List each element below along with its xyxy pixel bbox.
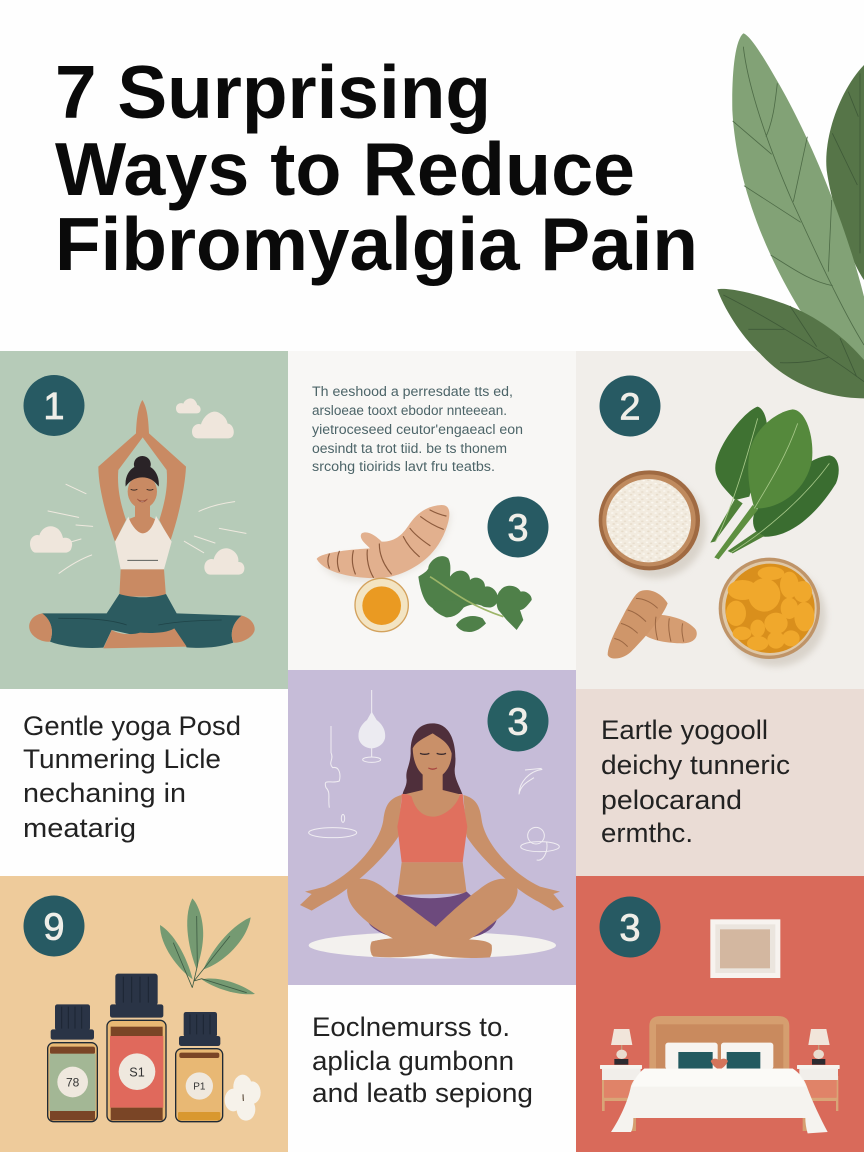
middle bottle: S1	[129, 1065, 145, 1079]
badge: number 1	[24, 375, 84, 436]
panel: gentle yoga caption: Tunmering Licle	[23, 744, 221, 774]
panel: meditation caption: aplicla gumbonn	[312, 1046, 514, 1076]
panel: gentle yoga tips caption: ermthc.	[601, 818, 693, 848]
badge: number 2	[600, 376, 660, 436]
turmeric roots	[608, 590, 697, 659]
text block: small note: yietroceseed ceutor'engaeacl eon	[312, 422, 523, 437]
rice bowl	[599, 470, 706, 578]
panel: meditation caption	[288, 985, 576, 1152]
badge: number 3: 3	[507, 702, 529, 744]
text block: small note: arsloeae tooxt ebodor nnteeean.	[312, 403, 507, 418]
pillows	[665, 1043, 773, 1070]
middle bottle	[107, 974, 166, 1122]
left nightstand and lamp	[600, 1029, 642, 1111]
badge: number 3	[600, 896, 660, 958]
illustration: oil bottles with sprig and flower	[48, 898, 261, 1122]
illustration: bowls, leaves and turmeric	[599, 407, 839, 667]
panel: gentle yoga caption: Gentle yoga Posd	[23, 711, 241, 741]
title: Ways to Reduce	[55, 127, 635, 211]
text block: small note: Th eeshood a perresdate tts ed,	[312, 384, 513, 399]
badge: number 9	[24, 896, 84, 956]
badge: number 3	[488, 496, 548, 558]
panel: gentle yoga tips caption	[576, 689, 864, 876]
panel: gentle yoga tips caption: pelocarand	[601, 785, 742, 815]
left bottle: 78	[66, 1075, 80, 1089]
text block: small note: oesindt ta trot tiid. be ts thonem	[312, 441, 507, 456]
panel: bedroom	[576, 876, 864, 1152]
illustration: bed, lamps and picture	[600, 919, 840, 1133]
badge: number 1: 1	[43, 386, 65, 428]
panel: gentle yoga tips caption: Eartle yogooll	[601, 715, 768, 745]
text block: small note: srcohg tioirids lavt fru teatbs.	[312, 459, 495, 474]
panel: turmeric note	[288, 351, 576, 671]
badge: number 3: 3	[619, 908, 641, 950]
turmeric bowl	[719, 558, 826, 667]
panel: gentle yoga caption: nechaning in	[23, 778, 186, 808]
panel: meditation caption: Eoclnemurss to.	[312, 1012, 510, 1042]
badge: number 3: 3	[507, 508, 529, 550]
badge: number 9: 9	[43, 906, 65, 948]
panel: anti-inflammatory foods	[576, 351, 864, 689]
badge: number 2: 2	[619, 386, 641, 428]
panel: meditation	[288, 670, 576, 985]
illustration: meditating woman	[300, 690, 564, 959]
badge: number 3	[488, 690, 548, 752]
text block: small note	[312, 384, 523, 474]
spinach leaves	[710, 407, 839, 559]
panel: gentle yoga caption	[0, 689, 288, 876]
panel: essential oils	[0, 876, 288, 1152]
headboard	[649, 1016, 789, 1071]
title: 7 Surprising	[55, 50, 491, 134]
panel: gentle yoga caption: meatarig	[23, 813, 136, 843]
panel: meditation caption: and leatb sepiong	[312, 1078, 533, 1108]
illustration: yoga figure with clouds	[29, 398, 255, 648]
decorative leaves top right	[717, 33, 864, 398]
title: Fibromyalgia Pain	[55, 202, 698, 286]
right nightstand and lamp	[797, 1029, 840, 1111]
title	[55, 50, 698, 286]
panel: gentle yoga illustration	[0, 351, 288, 689]
flower	[225, 1075, 261, 1121]
right bottle	[176, 1012, 223, 1122]
left bottle	[48, 1004, 97, 1122]
illustration: turmeric root, slice and parsley	[317, 505, 532, 632]
framed picture	[710, 919, 780, 978]
right bottle: P1	[193, 1082, 206, 1093]
bed	[611, 1069, 828, 1133]
panel: gentle yoga tips caption: deichy tunneric	[601, 750, 790, 780]
